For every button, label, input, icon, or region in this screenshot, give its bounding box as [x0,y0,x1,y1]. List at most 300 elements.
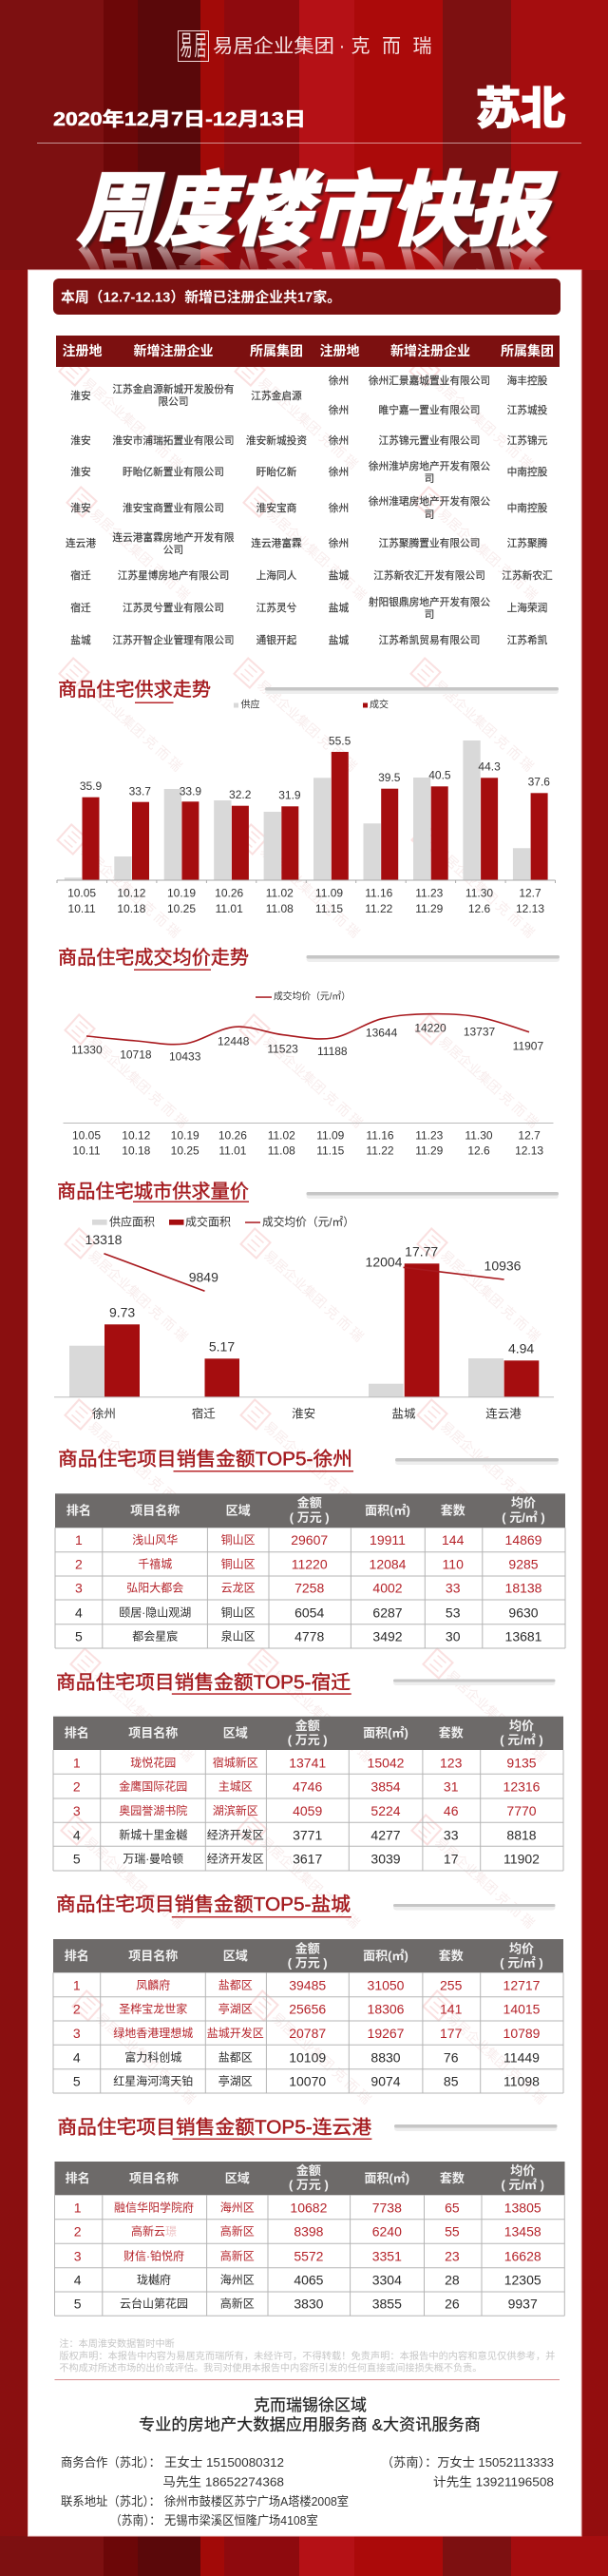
table header: 套数 [439,1949,464,1963]
right table rows: 徐州 [329,466,349,478]
table row 2: 6240 [372,2224,402,2240]
axis labels: 11.22 [366,1144,394,1158]
left table rows: 宿迁 [70,602,91,614]
watermarks: 易居企业集团·克 而 瑞 [269,1667,374,1764]
city labels: 连云港 [485,1406,522,1420]
data labels: 11907 [513,1039,543,1052]
date: 2020年12月7日-12月13日 [53,108,306,130]
left table rows: 淮安 [70,466,91,478]
heading [56,1894,555,1918]
axis labels: 10.18 [117,902,146,915]
table: newly registered companies [56,336,560,646]
table row 4: 8818 [506,1827,537,1842]
table row 3 [74,2248,542,2263]
table row 4: 11449 [504,2049,540,2065]
table header: 区域 [226,1504,251,1517]
data labels: 11523 [267,1042,298,1055]
header logo [179,30,431,62]
left table rows [66,383,307,646]
table row 5: 3039 [370,1851,401,1866]
table row 1 [73,1755,537,1770]
watermarks: 易居企业集团·克 而 瑞 [78,843,183,940]
contact information: （苏南）： [110,2513,161,2528]
data labels [71,1022,543,1064]
footnote and disclaimer: 不构成对所述市场的出价或评估。我司对使用本报告中内容所引发的任何直接或间接损失概不负责。 [59,2361,482,2374]
right table rows: 司 [425,473,434,485]
chart legend [256,990,351,1002]
table row 4: 4277 [370,1827,401,1842]
table row 4: 33 [444,1827,459,1842]
left table rows: 盱眙亿新 [256,466,297,478]
table row 1 [75,1532,542,1548]
table header: 金额 [295,1719,320,1733]
data labels: 39.5 [378,771,401,784]
table row 3: 3 [74,2248,82,2263]
table row 1: 1 [75,1532,83,1548]
table header [65,1941,543,1970]
data labels: 14220 [414,1022,446,1035]
table row 4: 8830 [370,2049,401,2065]
table row 5: 9937 [508,2297,538,2312]
table row 4: 颐居·隐山观湖 [119,1605,191,1619]
table row 1: 65 [445,2200,460,2215]
right table rows: 徐州汇景嘉城置业有限公司 [369,375,490,387]
table header: ( 元/㎡ ) [500,1956,543,1970]
contact information: （苏南）：万女士 15052113333 [381,2455,554,2470]
heading: 商品住宅项目销售金额TOP5-连云港 [57,2116,371,2138]
table row 5: 3617 [293,1851,322,1866]
watermarks: 易居企业集团·克 而 瑞 [444,2009,549,2106]
bar and line chart [54,1232,554,1420]
table row 5: 13681 [505,1628,542,1644]
watermarks: 易居企业集团·克 而 瑞 [256,375,361,471]
table row 2: 2 [73,1779,81,1795]
table row 4: 10109 [289,2049,326,2065]
city labels [92,1406,522,1420]
section: city supply, demand and price [54,1181,559,1420]
left table rows: 连云港富霖 [251,537,302,549]
left table rows: 江苏金启源新城开发股份有 [112,383,235,395]
data labels: 12448 [218,1035,250,1048]
watermarks: 易居企业集团·克 而 瑞 [80,677,185,774]
table row 3: 33 [446,1581,461,1596]
right table rows: 射阳银鼎房地产开发有限公 [369,596,490,608]
axis labels: 12.6 [467,1144,490,1158]
data labels: 13644 [366,1026,398,1039]
callout: weekly summary [53,279,560,315]
table row 2: 主城区 [218,1780,253,1794]
contact information: 无锡市梁溪区恒隆广场4108室 [164,2513,318,2528]
right table rows: 徐州 [329,404,349,416]
left table rows: 淮安 [70,502,91,514]
table row 2: 11220 [292,1556,328,1571]
watermarks: 易居企业集团·克 而 瑞 [432,1834,538,1931]
heading [57,1181,559,1202]
table header: 注册地 [63,343,103,358]
table header: 排名 [66,2171,90,2185]
table header: 项目名称 [128,1949,178,1963]
left table rows: 淮安 [70,434,91,447]
company name [213,35,431,57]
table row 4: 6287 [372,1605,403,1620]
table header: ( 万元 ) [288,1733,328,1747]
title reflection: 周度楼市快报 [72,233,564,322]
table row 5: 4778 [294,1628,324,1644]
table row 3: 177 [440,2026,463,2041]
section: average transaction price trend [58,947,560,1158]
table row 2 [75,1556,539,1571]
table row 3: 10789 [504,2026,541,2041]
table row 4: 4 [73,1827,81,1842]
contact information: 王女士 15150080312 [164,2455,284,2470]
watermarks: 易居企业集团·克 而 瑞 [86,1247,191,1344]
company name: 而 [382,36,401,57]
table header: 所属集团 [501,343,554,358]
table row 5: 17 [444,1851,459,1866]
table header: 套数 [439,1726,464,1740]
company tagline: 克而瑞锡徐区域 [254,2396,367,2414]
table row 2: 12084 [370,1556,407,1571]
watermarks: 易居企业集团·克 而 瑞 [444,1667,549,1764]
table [53,1939,563,2093]
right table rows: 中南控股 [507,466,548,478]
table row 3: 5224 [370,1803,401,1818]
data labels: 32.2 [229,788,252,801]
data labels: 37.6 [528,776,550,789]
table header [56,336,560,367]
table row 1 [73,1978,541,1993]
table header: 面积(㎡) [363,1726,408,1740]
table row 5: 经济开发区 [207,1851,264,1865]
table header: 区域 [225,2171,250,2185]
left table rows: 淮安新城投资 [246,434,307,447]
left table rows: 通银开起 [256,634,297,646]
right table rows: 江苏聚腾置业有限公司 [379,537,480,549]
table row 4: 富力科创城 [124,2049,181,2064]
table row 2: 2 [74,2224,82,2240]
table row 2: 高新区 [220,2224,255,2239]
table row 2: 亭湖区 [218,2001,253,2015]
contact information: 联系地址（苏北）： [61,2494,161,2509]
chart legend [234,698,389,711]
table row 2: 铜山区 [221,1556,256,1570]
table row 2: 25656 [289,2001,326,2016]
axis labels: 12.13 [515,1144,543,1158]
right table rows: 江苏希凯贸易有限公司 [379,634,480,646]
table header: 项目名称 [128,1726,178,1740]
table row 3: 7770 [506,1803,537,1818]
table row 3: 财信·铂悦府 [124,2248,184,2262]
table row 1: 盐都区 [218,1979,253,1992]
table row 5: 泉山区 [221,1629,256,1643]
right table rows: 海丰控股 [507,375,548,387]
table row 3: 盐城开发区 [207,2026,264,2040]
table header: 所属集团 [250,343,303,358]
left table rows: 盐城 [70,634,91,646]
axis labels: 11.01 [218,1144,247,1158]
axis labels: 11.08 [266,902,294,915]
table row 3: 3 [75,1581,83,1596]
table header: 金额 [296,2163,321,2178]
heading: 商品住宅项目销售金额TOP5-盐城 [56,1894,351,1915]
right table rows: 盐城 [329,602,349,614]
table row 5: 都会星宸 [132,1628,178,1643]
watermarks: 易居企业集团·克 而 瑞 [260,1033,366,1130]
right table rows: 徐州 [329,434,349,447]
table row 5: 5 [73,2074,81,2089]
title text: 周度楼市快报 [72,166,564,256]
heading [56,1672,555,1695]
chart legend [92,1215,354,1229]
right table rows: 江苏新农汇 [502,569,553,582]
axis labels [72,1129,543,1158]
callout: weekly summary: 本周（12.7-12.13）新增已注册企业共17家。 [61,289,341,306]
table row 4: 4 [73,2049,81,2065]
table row 2: 141 [440,2001,463,2016]
table row 5 [73,2074,540,2089]
table row 2 [73,2001,541,2016]
table row 3: 46 [444,1803,459,1818]
table header: 面积(㎡) [365,1504,410,1517]
heading: 商品住宅城市供求量价 [57,1181,249,1202]
axis labels: 11.02 [268,1129,295,1143]
heading [58,1449,559,1471]
left table rows: 江苏开智企业管理有限公司 [112,634,235,646]
table header: 面积(㎡) [364,2171,409,2185]
table row 1: 铜山区 [221,1532,256,1547]
axis labels: 11.08 [268,1144,295,1158]
data labels: 55.5 [329,734,352,747]
axis labels: 11.22 [365,902,393,915]
right table rows: 江苏希凯 [507,634,548,646]
heading [57,2116,557,2140]
company name: · [339,36,345,57]
axis labels: 10.12 [117,886,146,899]
company tagline [139,2396,481,2433]
right table rows: 中南控股 [507,502,548,514]
table row 4: 4065 [294,2273,324,2288]
chart legend: 供应面积 [109,1215,155,1229]
axis labels: 11.29 [415,1144,444,1158]
data labels [80,734,550,802]
watermarks: 易居企业集团·克 而 瑞 [436,1033,542,1130]
table row 5: 5 [75,1628,83,1644]
chart legend: 成交面积 [185,1215,231,1229]
right table rows: 盐城 [329,634,349,646]
watermarks [57,356,551,2109]
data labels: 13737 [464,1026,496,1039]
axis labels: 10.18 [122,1144,151,1158]
axis labels: 10.12 [122,1129,151,1143]
table row 1: 255 [440,1978,463,1993]
axis labels: 12.7 [519,886,542,899]
table row 1: 144 [442,1532,465,1548]
watermarks: 易居企业集团·克 而 瑞 [91,1667,197,1764]
data labels: 13318 [86,1232,123,1247]
table row 4 [75,1605,539,1620]
right table rows: 江苏锦元 [507,434,548,447]
table row 4: 6054 [294,1605,324,1620]
table row 1: 珑悦花园 [130,1755,176,1769]
chart legend: 成交均价（元/㎡） [274,990,351,1002]
section: top 5 Suqian [53,1672,563,1871]
left table rows: 江苏金启源 [251,390,302,402]
data labels: 35.9 [80,779,103,793]
left table rows: 连云港富霖房地产开发有限 [112,531,235,544]
table header: 均价 [509,1941,534,1956]
table row 3: 高新区 [220,2248,255,2262]
left table rows: 淮安市浦瑞拓置业有限公司 [112,434,235,447]
table row 5: 5 [74,2297,82,2312]
contact information: 徐州市鼓楼区苏宁广场A塔楼2008室 [164,2494,349,2509]
table header: 金额 [295,1941,320,1956]
table header: 套数 [441,1504,466,1517]
table row 1: 123 [440,1755,463,1770]
axis labels [67,886,544,915]
axis labels: 11.30 [466,886,493,899]
table row 5: 云台山第花园 [120,2297,188,2311]
table header: 均价 [511,1496,536,1509]
table row 3: 3351 [372,2248,402,2263]
table row 3: 19267 [368,2026,405,2041]
table row 4: 76 [444,2049,459,2065]
icon: seal logo: 居 [195,30,206,62]
watermarks: 易居企业集团·克 而 瑞 [86,1033,191,1130]
right table rows: 徐州 [329,537,349,549]
left table rows: 宿迁 [70,569,91,582]
table row 4 [74,2273,542,2288]
table row 5 [74,2297,538,2312]
table row 3: 7258 [294,1581,324,1596]
table header: 排名 [66,1504,91,1517]
right table rows: 徐州 [329,502,349,514]
table row 5: 红星海河湾天铂 [113,2074,193,2088]
table row 5: 3830 [294,2297,324,2312]
watermarks: 易居企业集团·克 而 瑞 [257,843,363,940]
table header: 面积(㎡) [363,1949,408,1963]
watermarks: 易居企业集团·克 而 瑞 [86,1418,191,1515]
table row 5: 11902 [504,1851,540,1866]
table row 1: 19911 [370,1532,406,1548]
table row 3: 16628 [504,2248,542,2263]
city labels: 盐城 [391,1407,416,1420]
right table rows: 徐州淮珺房地产开发有限公 [369,495,490,508]
watermarks: 易居企业集团·克 而 瑞 [87,506,193,603]
footnote and disclaimer: 版权声明：本报告中内容为易居克而瑞所有，未经许可，不得转载！免责声明：本报告中的内容和意见仅供参考，并 [59,2350,555,2362]
city labels: 徐州 [92,1406,116,1420]
table row 5: 11098 [504,2074,540,2089]
heading: 商品住宅供求走势 [58,679,211,701]
watermarks: 易居企业集团·克 而 瑞 [80,375,185,471]
table header: 项目名称 [129,2171,179,2185]
table row 3: 23 [445,2248,460,2263]
axis labels: 10.26 [215,886,244,899]
right table rows: 睢宁嘉一置业有限公司 [379,404,480,416]
axis labels: 11.29 [415,902,444,915]
contact information: 马先生 18652274368 [162,2475,284,2489]
table row 2 [74,2224,542,2240]
section: top 5 Xuzhou [55,1449,565,1648]
data labels: 12004 [366,1254,403,1269]
table row 2: 13458 [504,2224,542,2240]
data labels: 10936 [484,1259,522,1274]
table header: 均价 [509,1719,534,1733]
table row 4: 12305 [504,2273,542,2288]
left table rows: 淮安宝商置业有限公司 [123,502,224,514]
table row 3: 奥园誉湖书院 [119,1803,187,1817]
axis labels: 11.15 [315,902,343,915]
watermarks: 易居企业集团·克 而 瑞 [435,506,541,603]
left table rows: 公司 [163,545,183,556]
table row 4: 新城十里金樾 [119,1827,187,1841]
table row 2: 31 [444,1779,459,1795]
axis labels: 10.25 [171,1144,200,1158]
table row 2: 18306 [368,2001,405,2016]
right table rows: 司 [425,609,434,621]
table header: ( 万元 ) [288,1956,328,1970]
data labels: 9849 [189,1270,218,1285]
table row 5: 26 [445,2297,460,2312]
table row 1: 9135 [506,1755,537,1770]
table header: ( 元/㎡ ) [502,1510,545,1525]
table row 3: 绿地香港理想城 [113,2026,193,2040]
axis labels: 11.09 [315,886,343,899]
table row 2: 3854 [370,1779,401,1795]
axis labels: 11.23 [415,886,444,899]
right table rows: 徐州 [329,375,349,387]
table row 3: 18138 [505,1581,542,1596]
table row 4: 4 [75,1605,83,1620]
table row 1: 1 [73,1755,81,1770]
data labels: 11330 [71,1044,103,1057]
axis labels: 11.30 [465,1129,493,1143]
table row 3 [73,2026,541,2041]
right table rows: 江苏新农汇开发有限公司 [373,569,485,582]
table row 1: 29607 [291,1532,328,1548]
table row 3: 云龙区 [221,1582,256,1595]
right table rows: 江苏聚腾 [507,537,548,549]
table row 1: 39485 [289,1978,326,1993]
table header: 区域 [223,1726,248,1740]
table header: 排名 [65,1949,89,1963]
table row 4: 9630 [508,1605,539,1620]
table row 1: 融信华阳学院府 [114,2200,194,2214]
table row 3: 3 [73,2026,81,2041]
table row 2: 9285 [508,1556,539,1571]
data labels: 33.7 [129,784,151,798]
table header: 套数 [440,2171,465,2185]
table row 5: 9074 [370,2074,401,2089]
left table rows: 江苏灵兮置业有限公司 [123,602,224,614]
region tag: 苏北 [476,84,565,133]
table row 4: 盐都区 [218,2050,253,2064]
table row 5: 30 [446,1628,461,1644]
contact information [61,2455,554,2528]
table header: 排名 [65,1726,89,1740]
left table rows: 连云港 [66,537,96,549]
table row 3: 20787 [289,2026,326,2041]
table row 4: 4 [74,2273,82,2288]
axis labels: 10.05 [67,886,96,899]
data labels: 11188 [317,1045,348,1058]
table row 4: 28 [445,2273,460,2288]
data labels: 31.9 [278,789,301,802]
table row 2: 圣桦宝龙世家 [119,2001,187,2015]
table header: 区域 [223,1949,248,1963]
right table rows: 徐州淮垆房地产开发有限公 [369,460,490,472]
table row 3: 4002 [372,1581,403,1596]
table row 5: 85 [444,2074,459,2089]
